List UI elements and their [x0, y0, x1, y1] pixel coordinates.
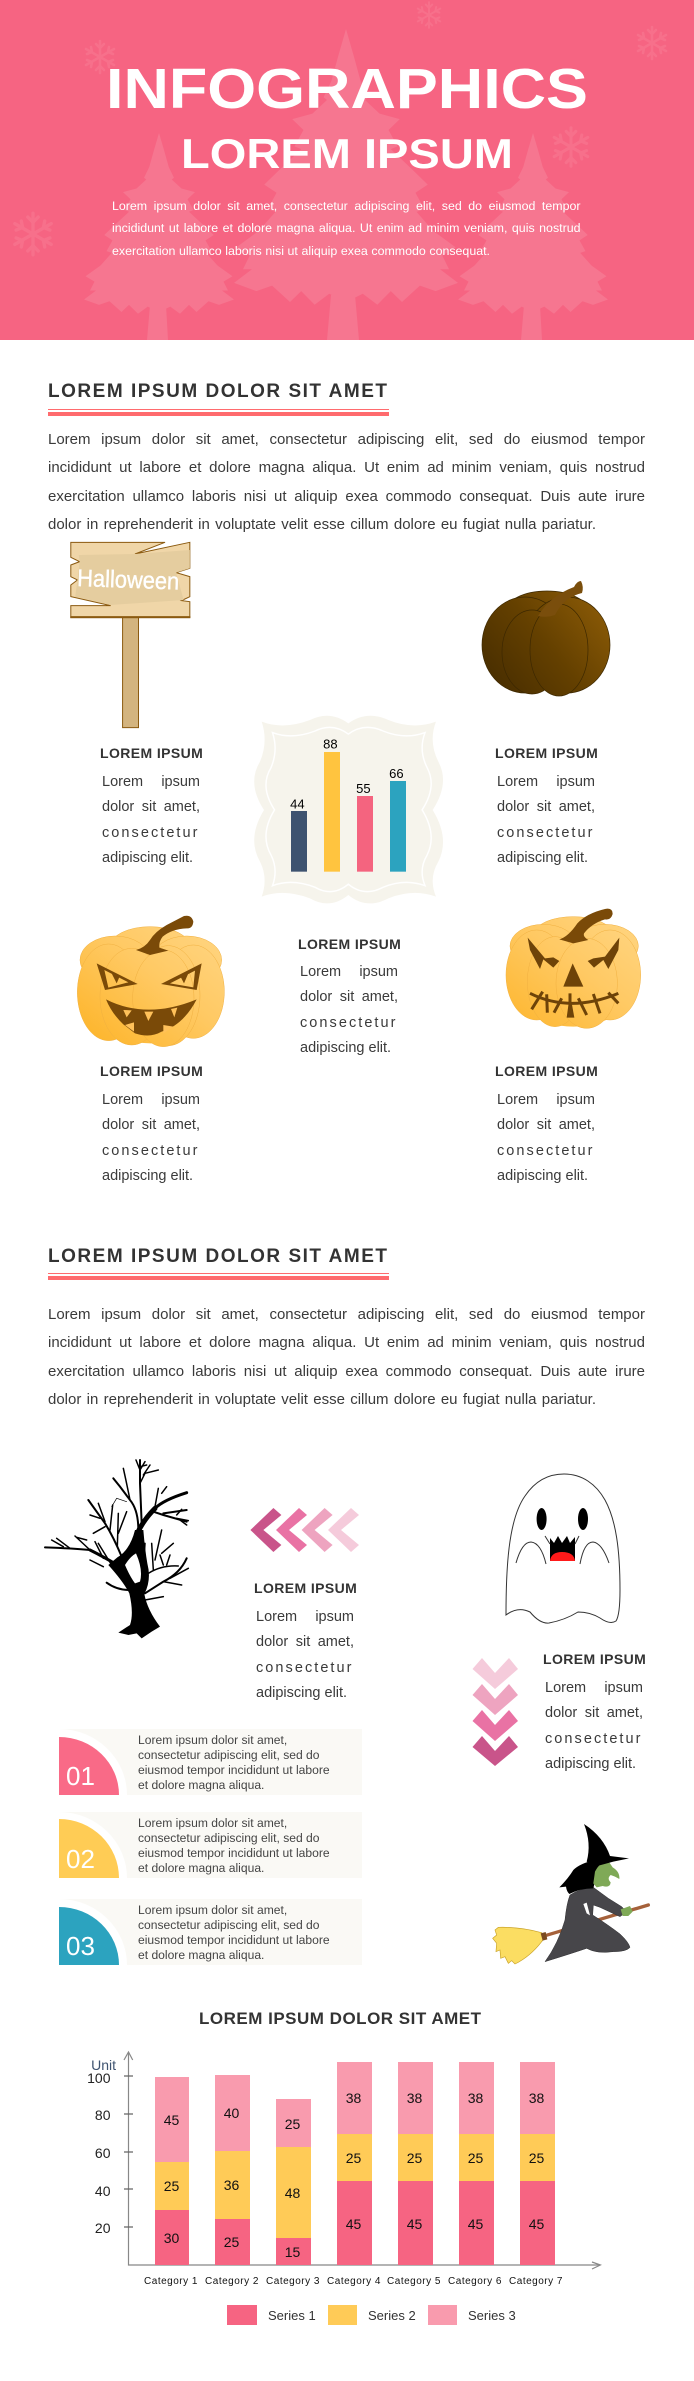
numbered item 01: Lorem ipsum dolor sit amet,: [138, 1733, 287, 1747]
text block: top right: adipiscing elit.: [497, 850, 588, 866]
numbered item 02: consectetur adipiscing elit, sed do: [138, 1831, 320, 1845]
text block: middle: adipiscing elit.: [300, 1040, 391, 1056]
tree silhouette: centre: [234, 29, 458, 340]
icon: pumpkin angry face: [77, 916, 224, 1047]
numbered item 02: [59, 1812, 362, 1878]
text block: beside tree: consectetur: [256, 1660, 354, 1676]
text block: middle: LOREM IPSUM: [298, 936, 401, 952]
text block: beside down chevrons: consectetur: [545, 1731, 643, 1747]
category labels: Category 1: [144, 2276, 198, 2287]
icon: ghost: [506, 1474, 620, 1623]
bar value labels: 25: [346, 2150, 361, 2166]
icon: brown pumpkin: [482, 581, 610, 696]
section 1 paragraph: [48, 431, 645, 533]
text block: top right: [495, 745, 598, 866]
text block: middle: dolor sit amet,: [300, 989, 398, 1005]
bar value labels: 45: [529, 2216, 544, 2232]
y axis labels: 20: [95, 2220, 111, 2236]
numbered item 03: [59, 1899, 362, 1965]
category labels: Category 5: [387, 2276, 441, 2287]
section 2 paragraph: dolor in reprehenderit in voluptate velit esse cillum dolore eu fugiat nulla pariatur.: [48, 1391, 596, 1408]
text block: lower left: [100, 1063, 203, 1184]
bar value labels: 40: [224, 2105, 239, 2121]
numbered item 02: et dolore magna aliqua.: [138, 1861, 264, 1875]
sign lettering: Halloween: [77, 565, 180, 596]
text block: top right: consectetur: [497, 825, 595, 841]
text block: middle: Lorem ipsum: [300, 964, 398, 980]
stacked bar chart: [87, 2052, 600, 2287]
series 1 bars: [155, 2181, 555, 2265]
arrow: down chevrons: [472, 1658, 518, 1766]
text block: top left: adipiscing elit.: [102, 850, 193, 866]
numbered item 01: 01: [66, 1761, 95, 1791]
text block: beside tree: dolor sit amet,: [256, 1634, 354, 1650]
subtitle: lorem ipsum: LOREM IPSUM: [181, 130, 513, 177]
numbered item 03: eiusmod tempor incididunt ut labore: [138, 1933, 330, 1947]
bar value labels: 38: [407, 2090, 422, 2106]
bar value labels: 25: [529, 2150, 544, 2166]
text block: beside tree: [254, 1580, 357, 1701]
section 2 paragraph: exercitation ullamco laboris nisi ut aliquip exea commodo consequat. Duis aute irure: [48, 1363, 645, 1380]
section 2 paragraph: [48, 1306, 645, 1408]
y axis labels: 80: [95, 2107, 111, 2123]
bar value labels: 25: [164, 2178, 179, 2194]
text block: middle: [298, 936, 401, 1056]
bar 88: 88: [323, 736, 338, 751]
text block: top left: consectetur: [102, 825, 200, 841]
category labels: Category 7: [509, 2276, 563, 2287]
category labels: Category 3: [266, 2276, 320, 2287]
bar value labels: 25: [224, 2234, 239, 2250]
numbered item 02: 02: [66, 1844, 95, 1874]
text block: lower left: dolor sit amet,: [102, 1117, 200, 1133]
series 3 bars: [155, 2062, 555, 2162]
text block: top right: Lorem ipsum: [497, 774, 595, 790]
icon: halloween signpost: [71, 542, 190, 728]
title: infographics: INFOGRAPHICS: [106, 57, 588, 121]
bar 66: [389, 766, 406, 872]
bar value labels: 25: [468, 2150, 483, 2166]
tree silhouette: left: [84, 133, 234, 340]
section heading 1: [48, 381, 389, 416]
text block: top right: dolor sit amet,: [497, 799, 595, 815]
text block: beside tree: Lorem ipsum: [256, 1609, 354, 1625]
category labels: Category 6: [448, 2276, 502, 2287]
bar 44: 44: [290, 796, 305, 811]
text block: lower left: Lorem ipsum: [102, 1092, 200, 1108]
bar value labels: 25: [407, 2150, 422, 2166]
chart panel: plaque with bars: [254, 716, 443, 903]
text block: beside down chevrons: [543, 1651, 646, 1772]
header paragraph: incididunt ut labore et dolore magna aliqua. Ut enim ad minim veniam, quis nostrud: [112, 221, 580, 235]
numbered item 03: 03: [66, 1931, 95, 1961]
numbered item 02: Lorem ipsum dolor sit amet,: [138, 1816, 287, 1830]
bar value labels: 25: [285, 2116, 300, 2132]
section 1 paragraph: exercitation ullamco laboris nisi ut aliquip exea commodo consequat. Duis aute irure: [48, 488, 645, 505]
numbered item 03: consectetur adipiscing elit, sed do: [138, 1918, 320, 1932]
numbered item 03: et dolore magna aliqua.: [138, 1948, 264, 1962]
section 2 paragraph: Lorem ipsum dolor sit amet, consectetur adipiscing elit, sed do eiusmod tempor: [48, 1306, 645, 1323]
header background panel: [0, 0, 694, 340]
bar 55: 55: [356, 781, 371, 796]
chart legend: Series 2: [368, 2308, 416, 2323]
bar value labels: 38: [468, 2090, 483, 2106]
text block: lower right: [495, 1063, 598, 1184]
section heading 2: LOREM IPSUM DOLOR SIT AMET: [48, 1246, 387, 1267]
bar 66: 66: [389, 766, 404, 781]
bar value labels: 45: [346, 2216, 361, 2232]
bar value labels: 38: [346, 2090, 361, 2106]
header paragraph: exercitation ullamco laboris nisi ut aliquip exea commodo consequat.: [112, 244, 490, 258]
text block: lower left: LOREM IPSUM: [100, 1063, 203, 1079]
icon: witch on broom: [493, 1824, 648, 1964]
numbered item 01: eiusmod tempor incididunt ut labore: [138, 1763, 330, 1777]
bar value labels: 48: [285, 2185, 300, 2201]
chart legend: Series 1: [268, 2308, 316, 2323]
text block: beside tree: LOREM IPSUM: [254, 1580, 357, 1596]
section heading 1: LOREM IPSUM DOLOR SIT AMET: [48, 381, 387, 402]
text block: lower right: adipiscing elit.: [497, 1168, 588, 1184]
text block: beside down chevrons: Lorem ipsum: [545, 1680, 643, 1696]
text block: middle: consectetur: [300, 1015, 398, 1031]
numbered item 03: Lorem ipsum dolor sit amet,: [138, 1903, 287, 1917]
y axis labels: 60: [95, 2145, 111, 2161]
text block: beside down chevrons: dolor sit amet,: [545, 1705, 643, 1721]
snowflakes: [15, 2, 666, 255]
y axis labels: [87, 2057, 116, 2236]
icon: bare black tree: [45, 1460, 188, 1638]
bar value labels: 15: [285, 2244, 300, 2260]
arrow: left chevrons: [250, 1508, 359, 1552]
numbered item 01: consectetur adipiscing elit, sed do: [138, 1748, 320, 1762]
text block: top left: LOREM IPSUM: [100, 745, 203, 761]
text block: beside down chevrons: adipiscing elit.: [545, 1756, 636, 1772]
chart legend: [227, 2305, 516, 2325]
section 1 paragraph: Lorem ipsum dolor sit amet, consectetur adipiscing elit, sed do eiusmod tempor: [48, 431, 645, 448]
icon: pumpkin stitched face: [506, 909, 641, 1028]
text block: beside tree: adipiscing elit.: [256, 1685, 347, 1701]
section 1 paragraph: dolor in reprehenderit in voluptate velit esse cillum dolore eu fugiat nulla pariatur.: [48, 516, 596, 533]
bar value labels: 36: [224, 2177, 239, 2193]
bar value labels: 38: [529, 2090, 544, 2106]
text block: lower right: consectetur: [497, 1143, 595, 1159]
tree silhouette: right: [458, 133, 608, 340]
series 2 bars: [155, 2134, 555, 2238]
y axis labels: 100: [87, 2070, 111, 2086]
bar value labels: 45: [407, 2216, 422, 2232]
text block: lower left: adipiscing elit.: [102, 1168, 193, 1184]
bar 44: [290, 796, 307, 872]
numbered item 02: eiusmod tempor incididunt ut labore: [138, 1846, 330, 1860]
bar 88: [323, 736, 340, 872]
text block: top left: Lorem ipsum: [102, 774, 200, 790]
bar value labels: 45: [164, 2112, 179, 2128]
bar value labels: 30: [164, 2230, 179, 2246]
text block: top left: dolor sit amet,: [102, 799, 200, 815]
chart title: LOREM IPSUM DOLOR SIT AMET: [199, 2009, 482, 2028]
text block: lower right: LOREM IPSUM: [495, 1063, 598, 1079]
category labels: [144, 2276, 563, 2287]
bar 55: [356, 781, 373, 872]
text block: top left: [100, 745, 203, 866]
chart legend: Series 3: [468, 2308, 516, 2323]
y axis labels: 40: [95, 2183, 111, 2199]
header paragraph: Lorem ipsum dolor sit amet, consectetur adipiscing elit, sed do eiusmod tempor: [112, 199, 580, 213]
text block: top right: LOREM IPSUM: [495, 745, 598, 761]
bar value labels: [164, 2090, 544, 2260]
y axis labels: Unit: [91, 2057, 116, 2073]
header paragraph: [112, 199, 580, 258]
text block: lower left: consectetur: [102, 1143, 200, 1159]
text block: lower right: Lorem ipsum: [497, 1092, 595, 1108]
bar value labels: 45: [468, 2216, 483, 2232]
section heading 2: [48, 1246, 389, 1280]
numbered item 01: [59, 1729, 362, 1795]
y axis and x axis: [124, 2052, 600, 2269]
category labels: Category 2: [205, 2276, 259, 2287]
section 1 paragraph: incididunt ut labore et dolore magna aliqua. Ut enim ad minim veniam, quis nostrud: [48, 459, 645, 476]
category labels: Category 4: [327, 2276, 381, 2287]
numbered item 01: et dolore magna aliqua.: [138, 1778, 264, 1792]
text block: lower right: dolor sit amet,: [497, 1117, 595, 1133]
text block: beside down chevrons: LOREM IPSUM: [543, 1651, 646, 1667]
section 2 paragraph: incididunt ut labore et dolore magna aliqua. Ut enim ad minim veniam, quis nostrud: [48, 1334, 645, 1351]
